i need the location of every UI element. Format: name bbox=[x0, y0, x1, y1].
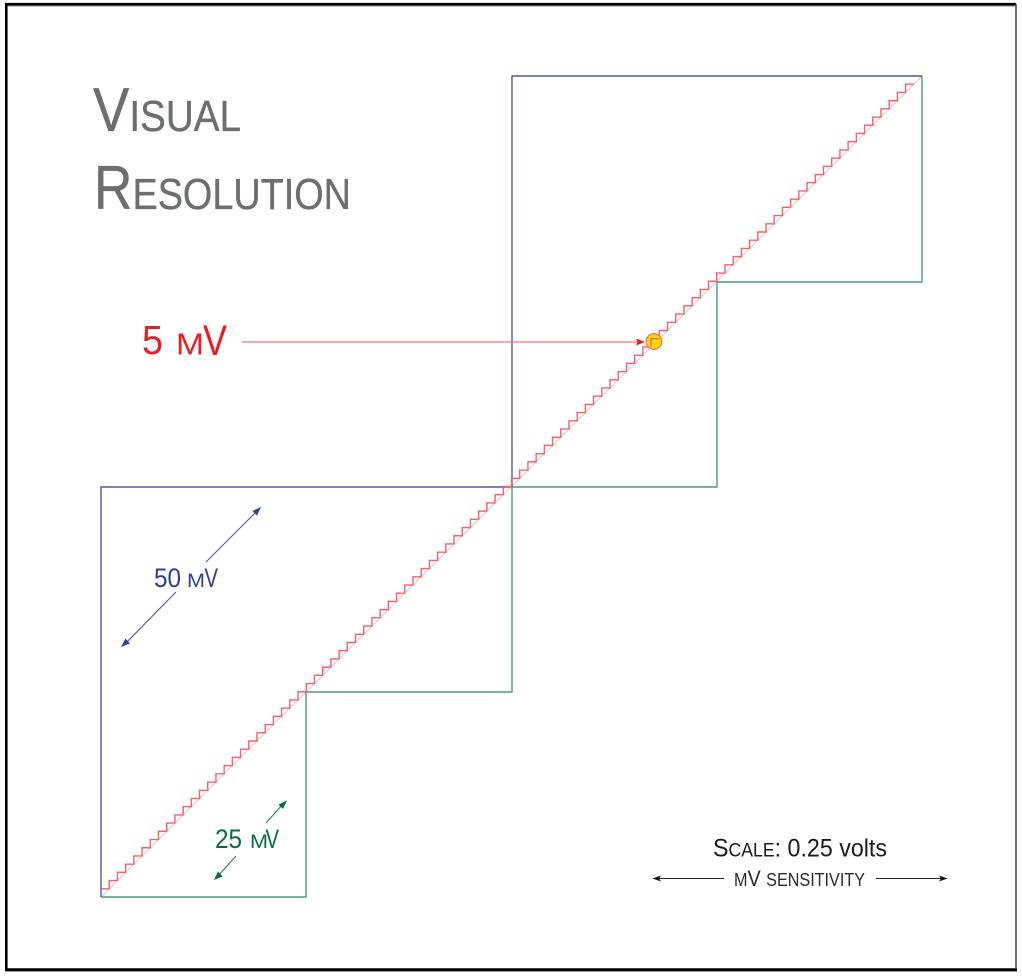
chart: 5 mV red staircase bbox=[101, 84, 914, 889]
label: 50 mV: V bbox=[204, 563, 218, 593]
label: 50 mV bbox=[154, 563, 218, 593]
label: 25 mV: M bbox=[250, 831, 268, 853]
scale label: SCALE: 0.25 volts bbox=[713, 834, 887, 862]
label: 50 mV: 50 bbox=[154, 563, 181, 593]
arrow: sensitivity left bbox=[652, 876, 724, 882]
arrow: sensitivity right bbox=[876, 876, 948, 882]
label: 5 mV: V bbox=[203, 317, 227, 365]
label: 50 mV: M bbox=[187, 570, 205, 592]
label: 5 mV bbox=[142, 317, 227, 365]
title bbox=[93, 76, 351, 223]
chart: 25 mV green staircase bbox=[101, 76, 922, 897]
arrow: 5 mV pointer bbox=[242, 338, 645, 346]
label: 25 mV: 25 bbox=[215, 824, 242, 854]
label: 25 mV: V bbox=[266, 824, 279, 854]
chart: 50 mV blue staircase bbox=[101, 76, 922, 897]
arrow: 50 mV up bbox=[206, 507, 261, 562]
label: 25 mV bbox=[215, 824, 279, 854]
arrow: 25 mV down bbox=[214, 856, 236, 880]
diagonal reference line bbox=[101, 76, 922, 897]
title: RESOLUTION bbox=[94, 154, 351, 223]
title: VISUAL bbox=[93, 76, 241, 145]
label: 5 mV: M bbox=[176, 326, 204, 362]
label: 5 mV: 5 bbox=[142, 317, 163, 363]
arrow: 25 mV up bbox=[266, 800, 287, 823]
sensitivity label: MV SENSITIVITY bbox=[734, 866, 865, 891]
arrow: 50 mV down bbox=[121, 592, 176, 647]
marker: 5 mV step highlight bbox=[646, 334, 662, 349]
